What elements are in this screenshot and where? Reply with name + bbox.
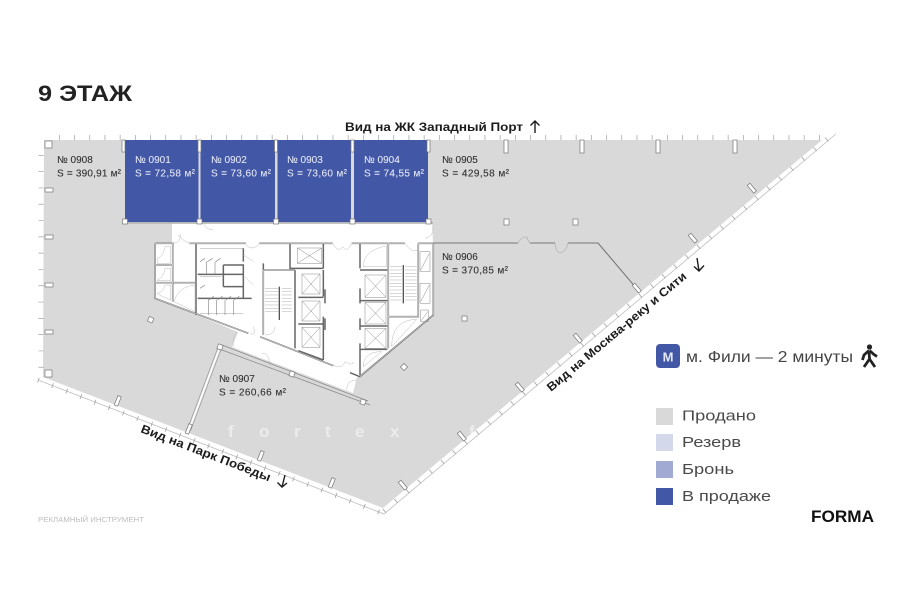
label: unit 0904 bbox=[364, 155, 425, 180]
label: unit 0904: S = 74,55 м² bbox=[364, 168, 425, 180]
view label: right diagonal: Вид на Москва-реку и Сити bbox=[544, 269, 689, 394]
legend bbox=[656, 408, 771, 505]
view label: bottom diagonal: Вид на Парк Победы bbox=[139, 422, 273, 484]
unit 0903 bbox=[278, 140, 351, 222]
core walls bbox=[155, 243, 433, 377]
unit area: sold floor area bbox=[43, 140, 822, 508]
floor glazing strip bbox=[38, 134, 836, 514]
metro text: м. Фили — 2 минуты bbox=[686, 349, 853, 366]
label: unit 0905: № 0905 bbox=[442, 155, 478, 166]
watermark: f bbox=[228, 422, 234, 441]
label: unit 0908 bbox=[57, 155, 122, 180]
unit 0904 bbox=[354, 140, 428, 222]
metro badge bbox=[656, 344, 680, 368]
label: unit 0901: № 0901 bbox=[135, 155, 171, 166]
legend: reserve: Резерв bbox=[682, 434, 741, 451]
label: unit 0902: № 0902 bbox=[211, 155, 247, 166]
legend: booked: Бронь bbox=[682, 461, 734, 478]
facade ticks bbox=[38, 135, 832, 514]
partition walls between units bbox=[188, 237, 637, 431]
label: unit 0906: № 0906 bbox=[442, 252, 478, 263]
unit 0901 bbox=[125, 140, 198, 222]
watermark: e bbox=[355, 422, 364, 441]
wall under units bbox=[123, 222, 433, 224]
label: unit 0905: S = 429,58 м² bbox=[442, 168, 510, 180]
watermark: t bbox=[325, 422, 331, 441]
label: unit 0902 bbox=[211, 155, 272, 180]
label: unit 0903: № 0903 bbox=[287, 155, 323, 166]
arrow: right diagonal down bbox=[694, 258, 704, 271]
restroom stalls bbox=[200, 248, 243, 315]
unit 0902 bbox=[200, 140, 275, 222]
label: unit 0901: S = 72,58 м² bbox=[135, 168, 196, 180]
watermark bbox=[228, 422, 475, 441]
watermark: r bbox=[294, 422, 301, 441]
label: unit 0907: S = 260,66 м² bbox=[219, 388, 287, 398]
stairs bbox=[265, 265, 417, 320]
core white area bbox=[156, 222, 433, 393]
view label: top: Вид на ЖК Западный Порт bbox=[345, 120, 523, 134]
logo: FORMA bbox=[811, 508, 874, 526]
watermark: o bbox=[259, 422, 269, 441]
label: unit 0903 bbox=[287, 155, 348, 180]
floor plan bbox=[38, 134, 836, 514]
metro badge: М bbox=[663, 350, 673, 364]
doors bbox=[174, 222, 433, 390]
core wall inner lines bbox=[155, 243, 433, 377]
legend: sold: Продано bbox=[682, 408, 756, 424]
label: unit 0904: № 0904 bbox=[364, 155, 400, 166]
label: unit 0908: № 0908 bbox=[57, 155, 93, 166]
watermark: f bbox=[469, 422, 475, 441]
label: unit 0908: S = 390,91 м² bbox=[57, 168, 122, 180]
icon: walking person bbox=[862, 344, 877, 367]
label: unit 0901 bbox=[135, 155, 196, 180]
label: unit 0907: № 0907 bbox=[219, 374, 255, 385]
columns and mullions bbox=[45, 140, 756, 490]
label: unit 0906: S = 370,85 м² bbox=[442, 266, 509, 276]
label: unit 0902: S = 73,60 м² bbox=[211, 168, 272, 180]
watermark: x bbox=[390, 422, 400, 441]
label: unit 0905 bbox=[442, 155, 510, 180]
arrow: up bbox=[530, 121, 540, 133]
label: unit 0906 bbox=[442, 252, 509, 276]
label: unit 0907 bbox=[219, 374, 287, 398]
arrow: bottom diagonal down bbox=[278, 475, 287, 487]
lifts and shafts bbox=[157, 246, 430, 367]
title: 9 ЭТАЖ bbox=[38, 81, 132, 106]
label: unit 0903: S = 73,60 м² bbox=[287, 168, 348, 180]
legend: for sale: В продаже bbox=[682, 488, 771, 505]
disclaimer: РЕКЛАМНЫЙ ИНСТРУМЕНТ bbox=[38, 515, 145, 524]
